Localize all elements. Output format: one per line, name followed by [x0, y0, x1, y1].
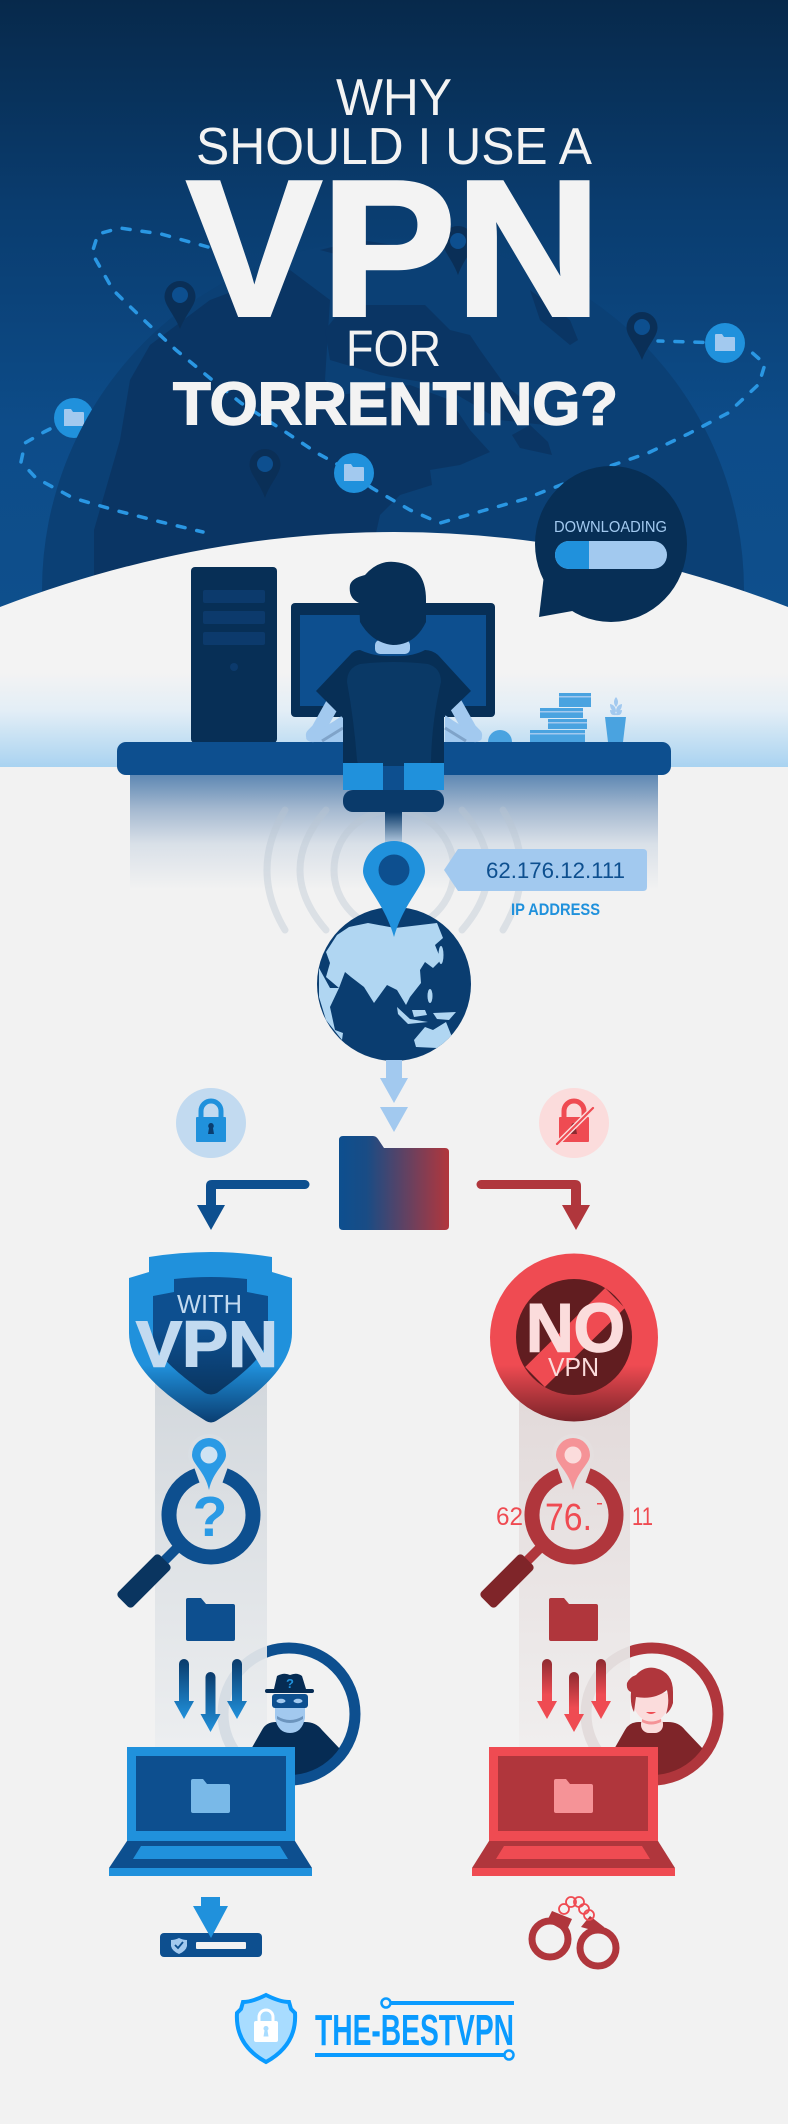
badge: with VPN shield: VPN [136, 1308, 278, 1380]
badge: with VPN shield [129, 1252, 292, 1422]
icon: magnifier revealing IP [479, 1434, 653, 1609]
arrow: to no VPN branch [477, 1180, 590, 1230]
logo: the-bestvpn [237, 1995, 514, 2062]
illustration: person at desk from behind [306, 562, 482, 844]
title: WHY [336, 69, 452, 127]
icon: magnifier with question mark [116, 1434, 253, 1609]
icon: magnifier revealing IP: 62 [496, 1503, 523, 1531]
title: VPN [187, 140, 601, 356]
callout: downloading speech bubble [535, 466, 687, 622]
illustration: desk [117, 742, 671, 890]
illustration: small globe with Asia [317, 907, 471, 1061]
orbit dashed path left [21, 429, 203, 532]
icon: magnifier revealing IP: 11 [632, 1503, 653, 1531]
icon: folder bubble left [54, 398, 94, 438]
icon: magnifier with question mark: ? [193, 1485, 227, 1549]
icon: blue laptop [109, 1747, 312, 1876]
icon: magnifier revealing IP: 76. [545, 1497, 592, 1539]
badge: no VPN prohibition: VPN [548, 1352, 599, 1382]
illustration: large dark globe [42, 239, 744, 620]
title: TORRENTING? [173, 370, 618, 438]
column: no VPN shaft [519, 1367, 630, 1747]
icon: small folder red [549, 1598, 598, 1641]
icon: location pin [363, 841, 425, 937]
callout: IP address tag [444, 849, 647, 919]
arrows: three blue download [174, 1659, 247, 1732]
callout: IP address tag: 62.176.12.111 [486, 858, 625, 883]
icon: potted plant [605, 697, 626, 742]
icon: stacked books [530, 693, 591, 742]
title: SHOULD I USE A [196, 118, 592, 176]
arrow: to VPN branch [197, 1180, 310, 1230]
callout: IP address tag: IP ADDRESS [511, 900, 600, 919]
icon: folder bubble right [705, 323, 745, 363]
badge: no VPN prohibition [490, 1254, 658, 1422]
icon: red laptop [472, 1747, 675, 1876]
arrows: light blue down [380, 1060, 408, 1132]
badge: with VPN shield: WITH [177, 1289, 242, 1319]
signal wave arcs [267, 810, 521, 930]
illustration: hidden spy in ring: ? [286, 1676, 294, 1691]
illustration: exposed user in ring [586, 1648, 723, 1795]
logo: the-bestvpn: THE-BESTVPN [315, 2006, 514, 2055]
icon: unlocked padlock slashed [539, 1088, 609, 1158]
column: with VPN shaft [155, 1367, 267, 1747]
icon: monitor [291, 603, 495, 717]
icon: small folder blue [186, 1598, 235, 1641]
title [173, 69, 618, 438]
icon: handcuffs [532, 1897, 616, 1966]
callout: downloading speech bubble: DOWNLOADING [554, 519, 667, 536]
white hill horizon [0, 532, 788, 767]
icon: map pins dark [164, 226, 658, 498]
illustration: hidden spy in ring [223, 1648, 360, 1795]
icon: safe download [160, 1897, 262, 1957]
icon: mouse [488, 730, 512, 742]
badge: no VPN prohibition: NO [526, 1290, 625, 1366]
panel: header night sky [0, 0, 788, 612]
icon: folder bubble centre [334, 453, 374, 493]
icon: central folder [339, 1136, 449, 1230]
orbit dashed path right [92, 228, 765, 523]
arrows: three red download [537, 1659, 611, 1732]
icon: locked padlock [176, 1088, 246, 1158]
icon: computer tower [191, 567, 277, 743]
title: FOR [346, 320, 441, 377]
